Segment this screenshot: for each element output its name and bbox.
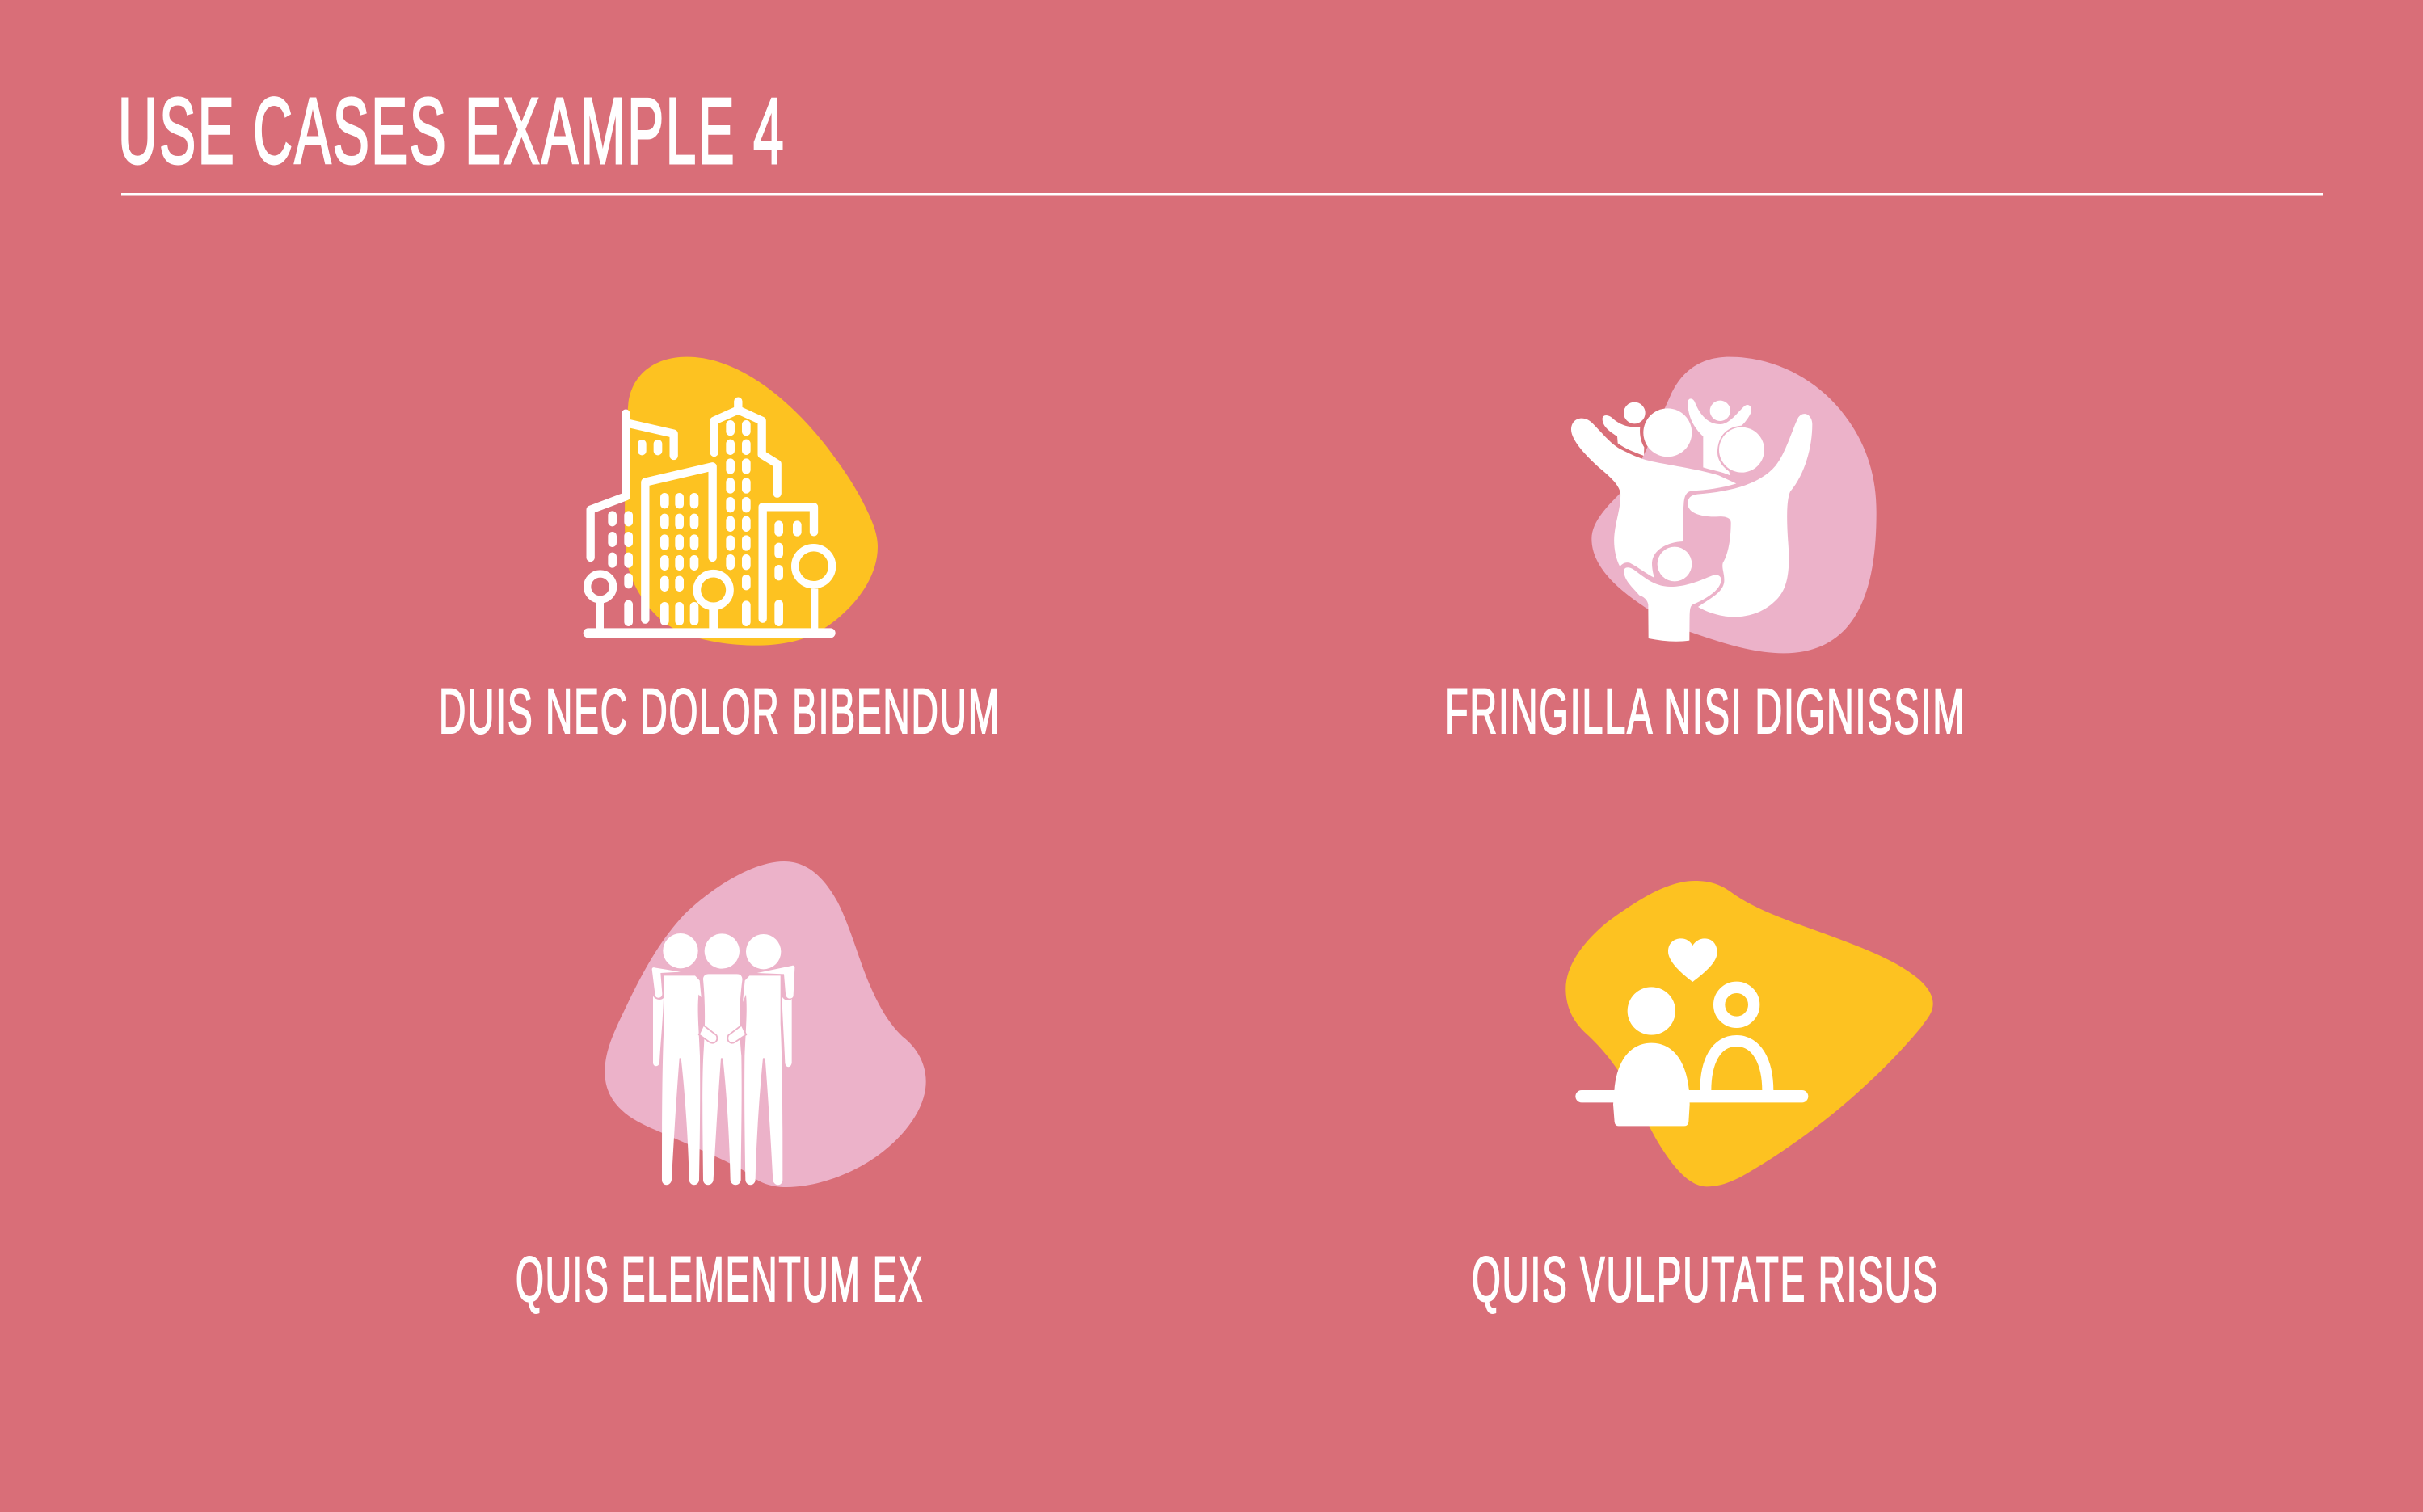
label: friends: QUIS ELEMENTUM EX [516, 1244, 924, 1315]
blob: yellow city background [625, 357, 878, 646]
icon: city buildings [588, 402, 832, 633]
panel: family use case [1445, 357, 1966, 747]
blob: pink friends background [605, 861, 926, 1187]
panel: couple use case [1472, 881, 1939, 1315]
icon: couple with heart [1582, 938, 1802, 1126]
blob: yellow couple background [1565, 881, 1933, 1186]
label: couple: QUIS VULPUTATE RISUS [1472, 1244, 1939, 1315]
icon: three friends [652, 933, 794, 1185]
icon: family [1571, 398, 1812, 642]
blob: pink family background [1591, 357, 1877, 653]
label: family: FRINGILLA NISI DIGNISSIM [1445, 676, 1966, 747]
label: city: DUIS NEC DOLOR BIBENDUM [439, 676, 1001, 747]
panel: friends use case [516, 861, 926, 1315]
panel: city use case [439, 357, 1001, 747]
title: USE CASES EXAMPLE 4 [118, 78, 786, 183]
